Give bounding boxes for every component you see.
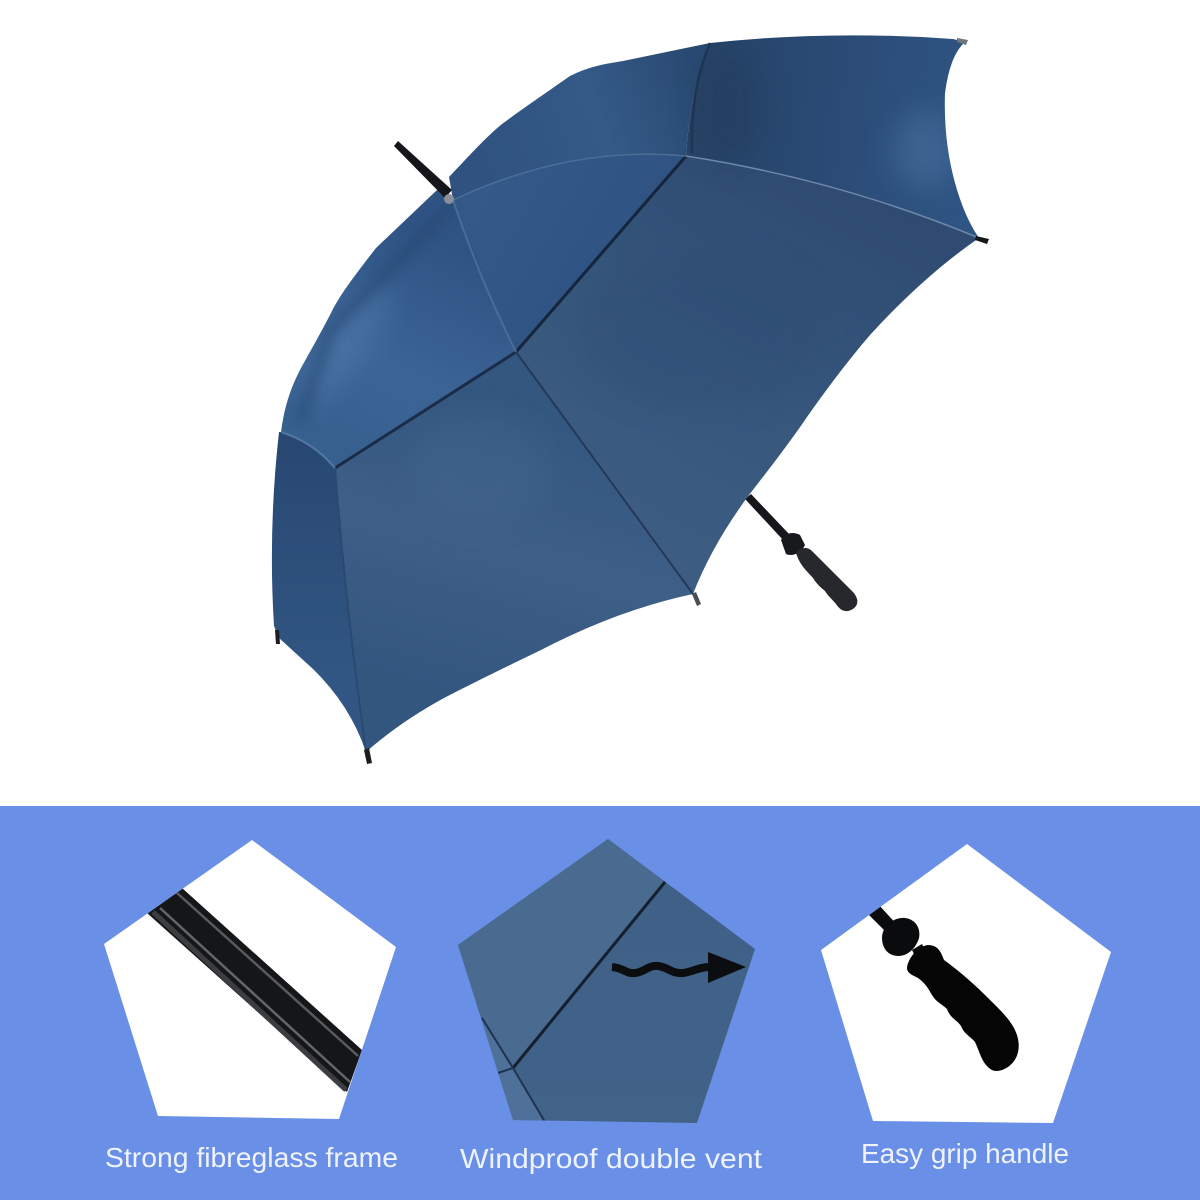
canopy panel: left vent bbox=[281, 190, 516, 468]
canopy shading bbox=[287, 55, 957, 525]
canopy seams bbox=[281, 43, 979, 752]
umbrella photo bbox=[272, 35, 989, 764]
icon: wind arrow bbox=[612, 952, 746, 983]
pentagon: handle closeup bbox=[821, 844, 1111, 1123]
hub bbox=[444, 194, 454, 204]
canopy panel: lower bbox=[335, 352, 693, 752]
icon: fibreglass rod bbox=[147, 888, 362, 1092]
canopy panel: large right bbox=[516, 156, 979, 594]
umbrella canopy bbox=[272, 35, 989, 764]
umbrella top ferrule bbox=[394, 141, 452, 198]
canopy panel: centre vent bbox=[453, 154, 686, 352]
pentagon: frame closeup bbox=[104, 840, 396, 1119]
feature: handle bbox=[821, 844, 1111, 1169]
canopy panel: upper left bbox=[449, 43, 710, 200]
canopy panel: upper right bbox=[686, 35, 979, 238]
caption: frame: Strong fibreglass frame bbox=[105, 1142, 398, 1173]
caption: vent: Windproof double vent bbox=[460, 1143, 762, 1174]
rib tips bbox=[275, 38, 989, 764]
feature: vent bbox=[450, 830, 762, 1174]
umbrella shaft and handle bbox=[745, 494, 857, 611]
pentagon: vent closeup bbox=[450, 830, 760, 1130]
caption: handle: Easy grip handle bbox=[861, 1138, 1069, 1169]
icon: grip handle bbox=[866, 904, 1019, 1071]
canopy panel: far left bbox=[272, 432, 366, 752]
blue feature band bbox=[0, 806, 1200, 1200]
feature: frame bbox=[104, 840, 398, 1173]
